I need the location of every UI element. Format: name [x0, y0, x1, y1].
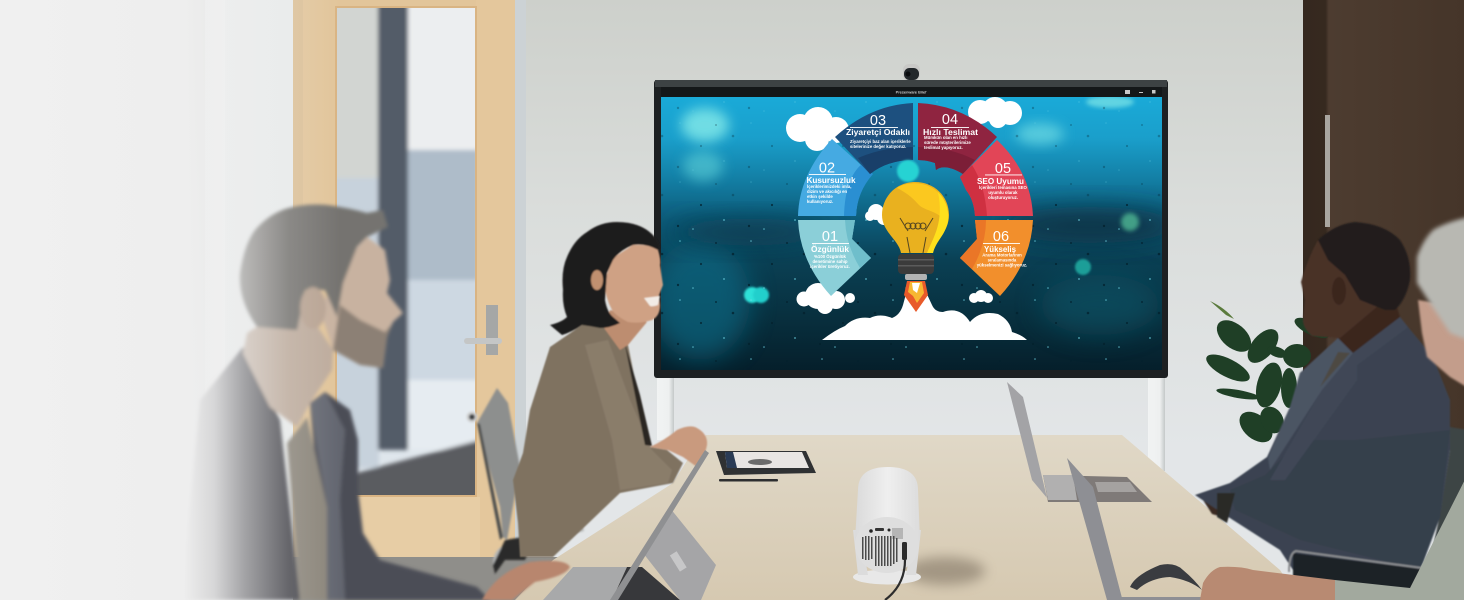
ear: [1332, 277, 1346, 305]
woman foreground right: [1200, 215, 1464, 600]
right laptop: [1067, 458, 1207, 600]
blazer: [513, 323, 683, 557]
chair seat shadow: [1293, 553, 1422, 600]
hand: [1203, 493, 1225, 518]
segment 04: sürede müşterilerimize: [924, 140, 971, 145]
webcam: [903, 64, 920, 81]
cloud lower right: [969, 290, 993, 303]
segment 01: içerikler üretiyoruz.: [810, 264, 850, 269]
left man: [180, 204, 490, 600]
segment 02: kullanıyoruz.: [807, 199, 833, 204]
dark wood panel right: [1303, 0, 1464, 440]
tablet on table: [716, 451, 816, 475]
left white fade: [0, 0, 340, 600]
segment 05: 05: [995, 161, 1011, 177]
hair: [550, 222, 660, 335]
face: [1418, 300, 1464, 395]
segment 06: [960, 220, 1033, 296]
ear: [591, 270, 603, 290]
wooden door with window: [293, 0, 515, 557]
woman in blazer: [513, 222, 707, 557]
cloud lower left: [796, 283, 855, 314]
segment 01: [798, 220, 871, 296]
chair behind woman: [466, 388, 584, 574]
side wall and door casing: [205, 0, 526, 600]
chair arm: [1289, 551, 1422, 572]
segment 04: Hızlı Teslimat: [923, 128, 978, 137]
ear: [300, 287, 326, 329]
chair back: [1430, 427, 1464, 560]
door handle: [464, 305, 502, 355]
segment 01: 01: [822, 229, 838, 245]
smile: [644, 296, 660, 306]
segment 02: Kusursuzluk: [806, 176, 856, 185]
face: [1301, 232, 1385, 338]
plant: [1203, 301, 1332, 448]
segment 05: SEO Uyumu: [977, 177, 1024, 186]
segment 02: İçeriklerimizdeki imla,: [807, 184, 851, 189]
back laptop: [1007, 382, 1152, 502]
window title: Presenware Brief: [896, 90, 927, 94]
segment 04: teslimat yapıyoruz.: [924, 145, 963, 150]
segment 04: [918, 103, 997, 174]
table: [515, 435, 1300, 600]
hair: [1417, 215, 1464, 345]
segment 02: etkin şekilde: [807, 194, 833, 199]
segment 01: denetimine sahip: [812, 259, 848, 264]
segment 06: yükselmenizi sağlıyoruz.: [977, 262, 1027, 268]
hair: [240, 204, 388, 330]
face: [320, 237, 403, 368]
projector: [853, 467, 921, 600]
smoke cloud base: [822, 290, 1027, 340]
window controls: [1125, 90, 1156, 94]
right man: [1195, 222, 1464, 600]
segment 06: sıralamasında: [988, 258, 1017, 262]
segment 05: İçerikleri temasına SEO: [979, 185, 1028, 190]
segment 04: Mümkün olan en hızlı: [924, 135, 967, 140]
screen wallpaper with rain drops: [650, 96, 1180, 370]
teal blob above bulb: [897, 160, 919, 182]
segment 03: sitelerinize değer katıyoruz.: [850, 144, 906, 149]
segment 03: [835, 103, 913, 174]
neck: [604, 310, 647, 350]
segment 06: Yükseliş: [984, 245, 1017, 254]
projector shadow: [905, 557, 985, 585]
segment 04: 04: [942, 112, 958, 128]
cuff: [1217, 493, 1235, 523]
sleeve: [1335, 450, 1464, 600]
display monitor: [654, 80, 1168, 378]
jacket: [180, 347, 300, 600]
segment 06: Arama Motorlarının: [982, 252, 1022, 258]
segment 02: [798, 139, 873, 216]
front laptop: [543, 450, 716, 600]
segment 05: [960, 140, 1033, 216]
segment 03: Ziyaretçiyi baz alan içeriklerle: [850, 139, 911, 144]
cloud top right: [968, 97, 1022, 128]
jacket: [1195, 317, 1450, 587]
hand: [1200, 567, 1335, 600]
segment 06: 06: [993, 229, 1009, 245]
segment 05: uyumlu olarak: [988, 190, 1018, 195]
segment 02: 02: [819, 160, 835, 176]
segment 02: dizim ve akıcılığı en: [807, 189, 847, 194]
mouse: [1130, 564, 1202, 590]
shirt: [1320, 352, 1350, 387]
arm: [1230, 430, 1450, 570]
cloud top left: [786, 107, 849, 151]
segment 01: %100 Özgünlük: [814, 254, 846, 259]
flame: [904, 281, 928, 312]
neck: [243, 300, 333, 427]
segment 05: oluşturuyoruz.: [988, 195, 1018, 200]
segment 03: 03: [870, 113, 886, 129]
floor: [293, 557, 583, 600]
neck: [1312, 300, 1400, 353]
display stands: [657, 375, 1165, 471]
stylus: [719, 479, 778, 482]
hands: [650, 426, 707, 467]
cloud near bulb: [865, 204, 891, 225]
vent slats: [862, 536, 898, 566]
right lapel: [1270, 317, 1408, 480]
infographic: clouds: [786, 97, 1022, 314]
shirt: [287, 417, 327, 600]
beard: [333, 305, 392, 368]
filament: [900, 218, 933, 253]
hair: [1318, 222, 1410, 310]
segment 01: Özgünlük: [811, 245, 850, 254]
left lapel: [1268, 338, 1353, 470]
face: [605, 245, 663, 323]
segment 03: Ziyaretçi Odaklı: [846, 128, 910, 137]
hand of left man: [482, 561, 570, 600]
light bulb: [882, 182, 949, 280]
